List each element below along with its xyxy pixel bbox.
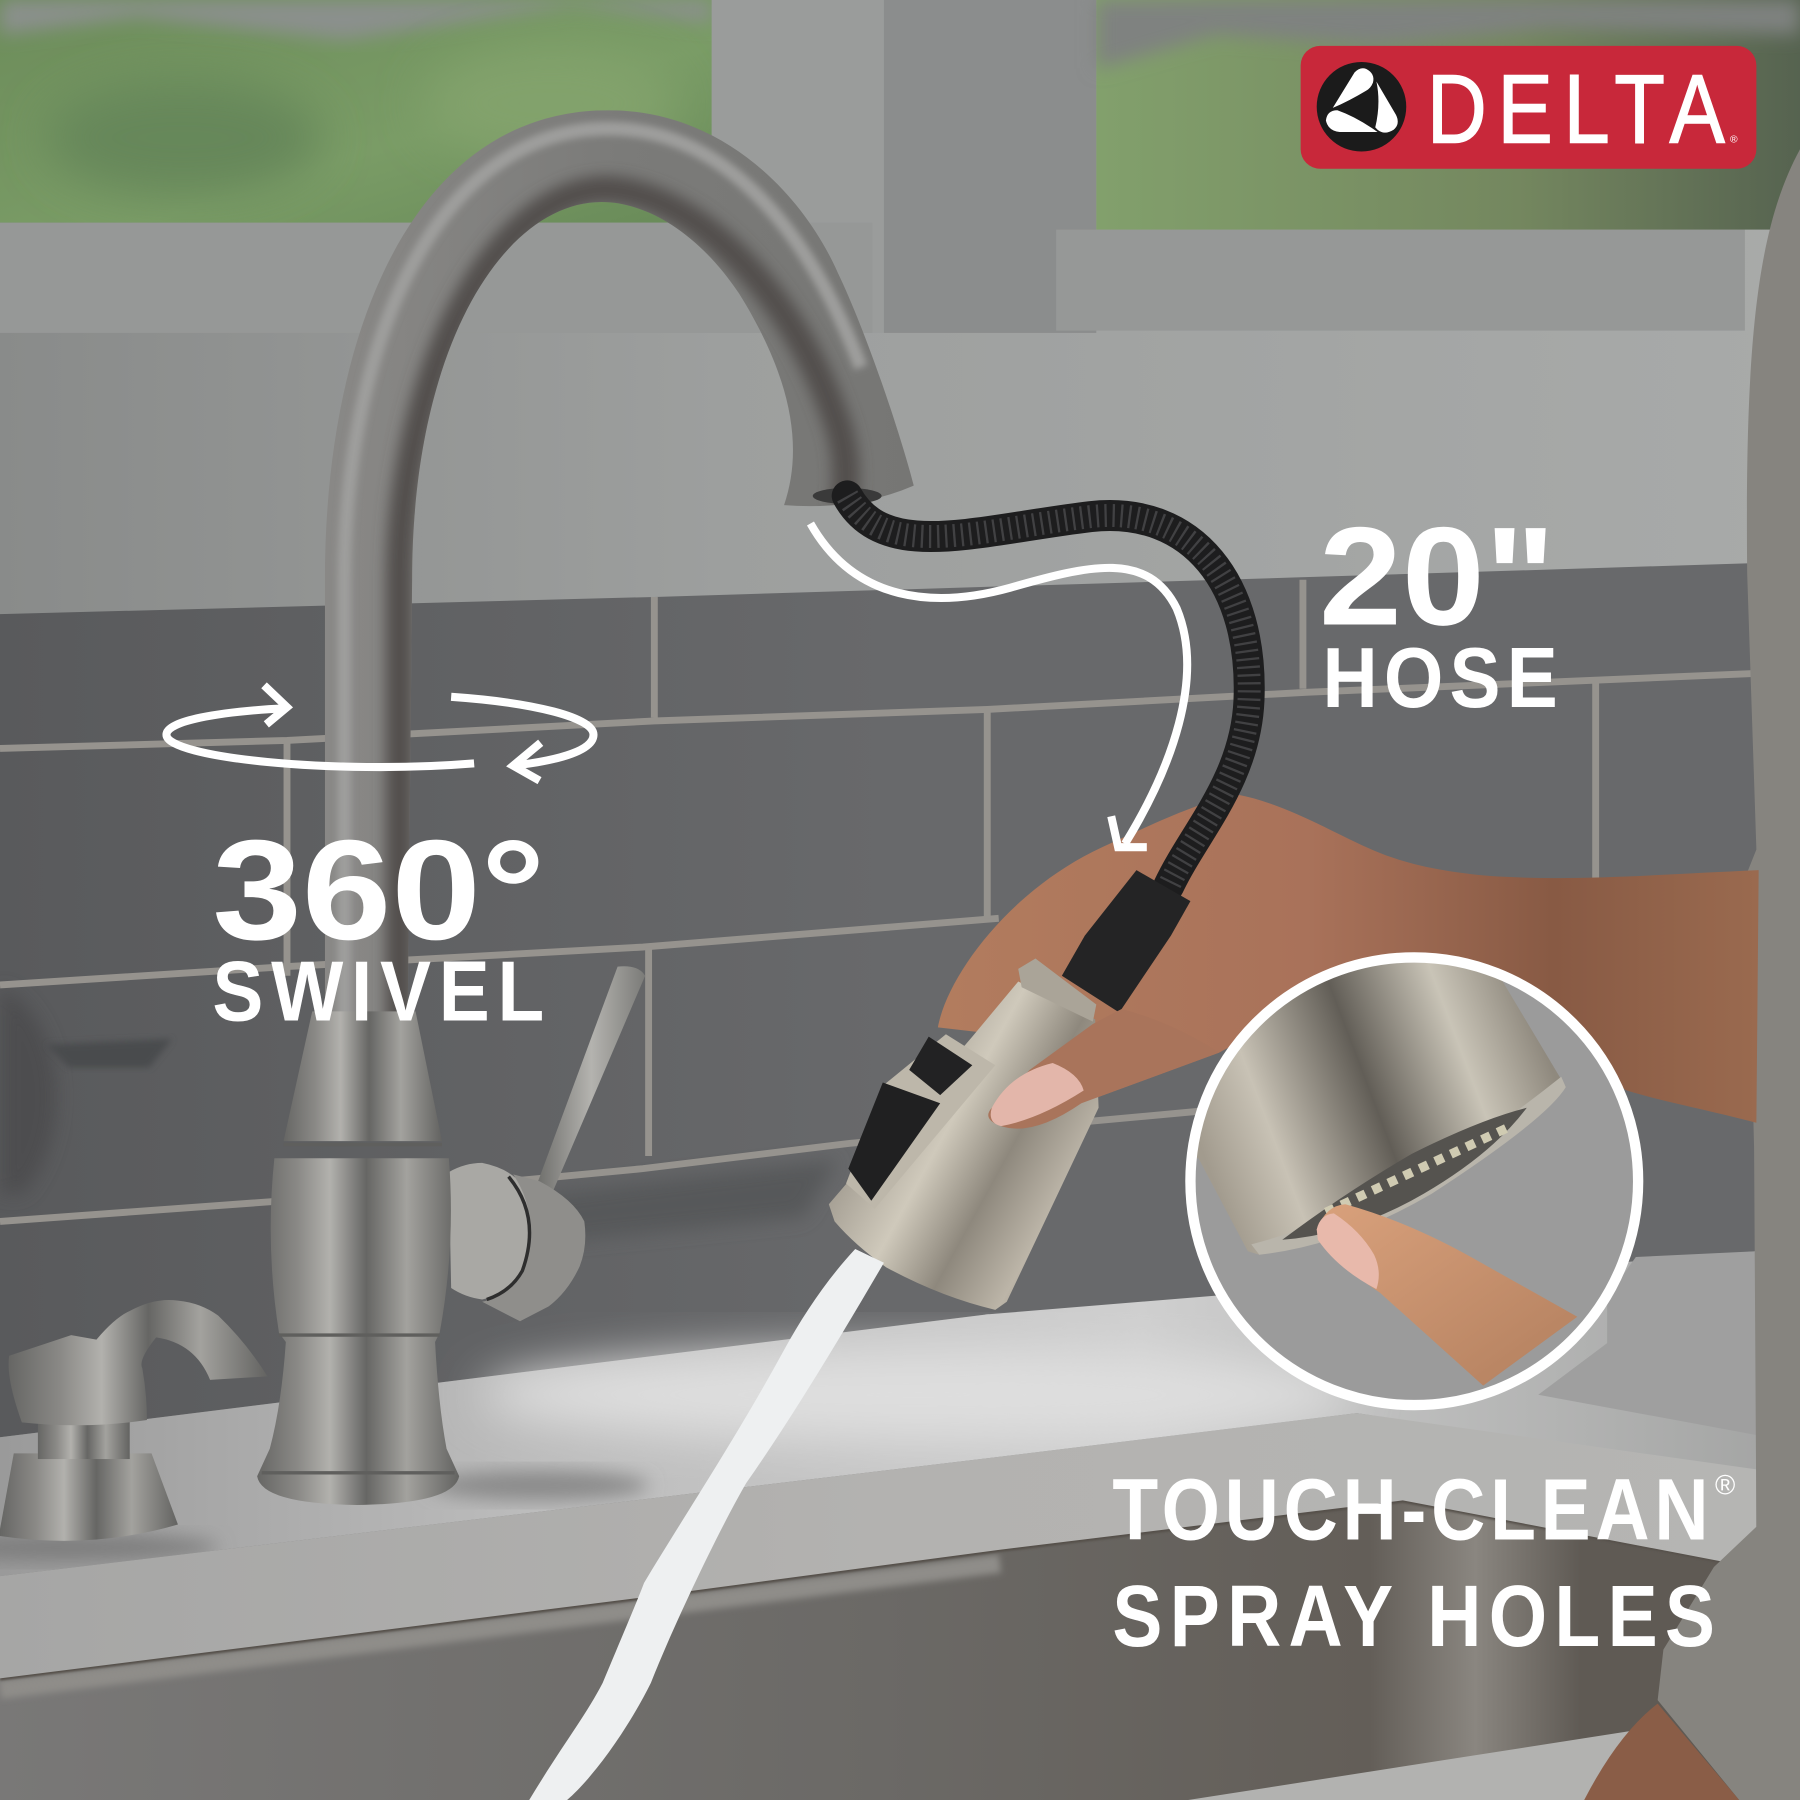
label: touch-clean spray holes: TOUCH-CLEAN xyxy=(1112,1461,1713,1559)
pull-down sprayer xyxy=(829,959,1099,1310)
handle hub xyxy=(449,1163,585,1321)
soap dispenser xyxy=(0,1300,267,1541)
faucet body xyxy=(257,1158,459,1505)
spray toggle buttons xyxy=(846,1034,995,1209)
hose connector xyxy=(1062,870,1190,1012)
sink basin xyxy=(0,1500,1756,1800)
handle lever xyxy=(537,966,645,1190)
faucet xyxy=(257,103,930,1505)
sprayer collar xyxy=(1018,959,1096,1022)
hose xyxy=(847,496,1249,886)
spout dark band xyxy=(399,189,846,1033)
fingernail xyxy=(1317,1213,1379,1289)
hand and arm xyxy=(938,794,1759,1123)
spout highlight xyxy=(344,129,861,1033)
label: 20 inch hose: HOSE xyxy=(1322,631,1564,726)
counter front face xyxy=(0,1413,1756,1678)
thumb over sprayer xyxy=(988,1009,1219,1129)
Delta logo: ® xyxy=(1730,134,1738,145)
dish rack behind inset xyxy=(1538,1251,1756,1435)
finger pressing holes xyxy=(1317,1204,1577,1386)
nozzle cylinder xyxy=(1197,962,1560,1254)
logo mark xyxy=(1326,68,1398,133)
second hand at bottom xyxy=(1584,1704,1739,1800)
curved length arrow xyxy=(810,523,1187,847)
thumbnail xyxy=(991,1063,1084,1126)
label: 360 swivel xyxy=(212,811,552,1039)
spout mid highlight xyxy=(365,580,375,1033)
nozzle face with spray holes xyxy=(1251,1077,1566,1255)
right window with trees xyxy=(1096,0,1800,230)
spout arc xyxy=(310,103,930,1045)
faucet base cone xyxy=(284,1011,442,1141)
label: touch-clean spray holes: SPRAY HOLES xyxy=(1112,1568,1722,1665)
label: 360 swivel: SWIVEL xyxy=(212,945,552,1039)
inset circle: touch-clean nozzle xyxy=(1182,947,1638,1405)
sweater sleeve xyxy=(1584,149,1800,1800)
Delta logo: DELTA xyxy=(1427,55,1736,164)
spout mouth xyxy=(813,488,882,504)
label: 20 inch hose: 20" xyxy=(1319,497,1555,654)
left window with trees xyxy=(0,0,712,223)
label: touch-clean spray holes xyxy=(1112,1461,1735,1665)
sprayer body xyxy=(829,982,1099,1310)
counter top xyxy=(0,1251,1756,1576)
label: 20 inch hose xyxy=(1319,497,1564,726)
water stream xyxy=(529,1249,884,1800)
Delta logo xyxy=(1301,46,1756,169)
window frame center xyxy=(0,0,1745,333)
label: touch-clean spray holes: ® xyxy=(1715,1470,1735,1501)
label: 360 swivel: 360° xyxy=(212,811,545,970)
swivel arrows xyxy=(166,685,593,781)
tile backsplash xyxy=(0,562,1774,1458)
upper wall xyxy=(0,0,1800,620)
